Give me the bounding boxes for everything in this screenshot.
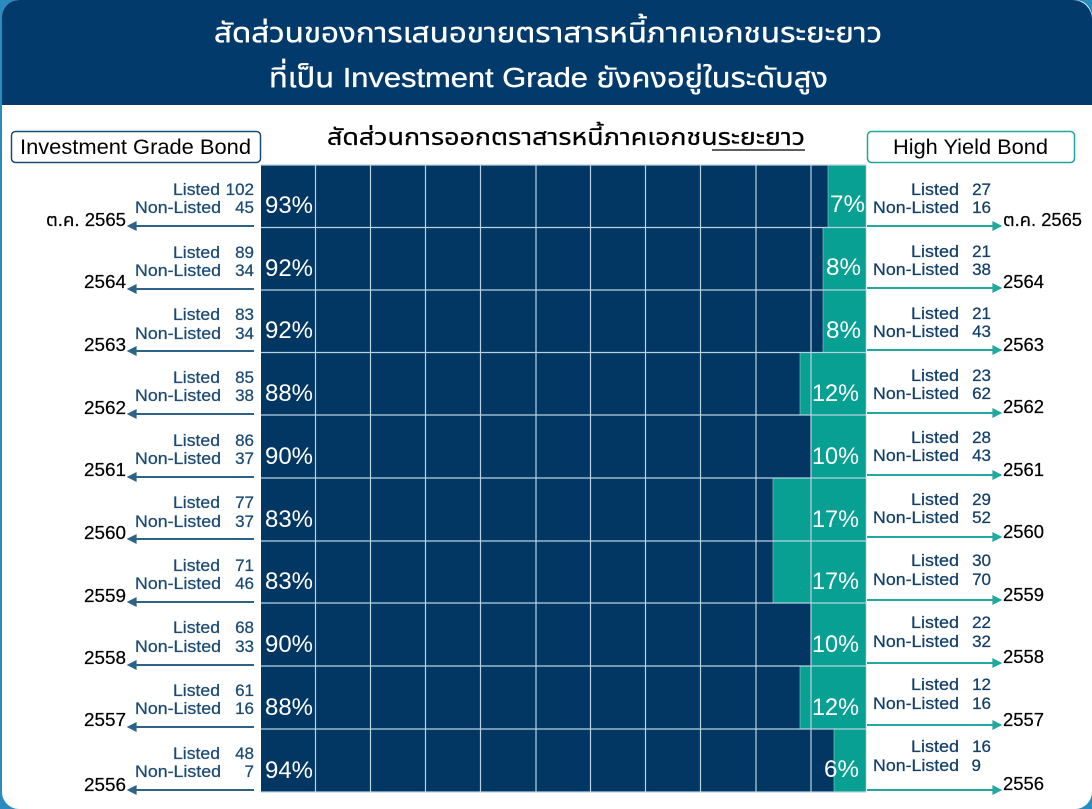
investment grade row: 2556: 48 xyxy=(235,744,254,763)
investment grade row: 2563: Listed xyxy=(173,305,220,324)
high yield row: 2562: 62 xyxy=(972,384,991,403)
investment grade row: 2556: 7 xyxy=(245,762,254,781)
legend: Investment Grade Bond: Investment Grade Bond xyxy=(20,136,251,159)
high yield row: 2564: Non-Listed xyxy=(873,260,959,279)
high yield percentages xyxy=(812,191,865,783)
high yield row: 2563: 21 xyxy=(972,304,991,323)
arrow xyxy=(128,222,254,230)
high yield row: 2558: 2558 xyxy=(1003,647,1044,667)
high yield row: 2564: Listed xyxy=(911,242,959,261)
investment grade row: 2559: 46 xyxy=(235,574,254,593)
arrow xyxy=(128,598,254,606)
investment grade row: 2559: 71 xyxy=(235,556,254,575)
investment grade row: 2561: Non-Listed xyxy=(135,449,221,468)
high yield row: 2557: 16 xyxy=(972,694,991,713)
high yield bars xyxy=(773,165,866,792)
investment grade percentages: 88% xyxy=(265,380,313,407)
high yield row: 2562 xyxy=(867,366,1044,417)
investment grade row: 2562: 38 xyxy=(235,386,254,405)
arrow xyxy=(867,409,1001,417)
investment grade row: 2559: Listed xyxy=(173,556,220,575)
high yield row: 2563: 2563 xyxy=(1003,335,1044,355)
high yield row: 2556: 9 xyxy=(972,756,981,775)
high yield percentages: 8% xyxy=(826,317,861,344)
arrow xyxy=(867,786,1001,794)
investment grade percentages: 83% xyxy=(265,506,313,533)
investment grade row: 2562 xyxy=(84,368,254,418)
investment grade row: 2563: 83 xyxy=(235,305,254,324)
investment grade percentages: 83% xyxy=(265,568,313,595)
high yield row: 2560 xyxy=(867,490,1044,542)
investment grade row: 2558: Non-Listed xyxy=(135,637,221,656)
high yield row: 2559: Non-Listed xyxy=(873,570,959,589)
investment grade row: ต.ค. 2565: ต.ค. 2565 xyxy=(46,210,126,230)
high yield percentages: 12% xyxy=(812,694,859,721)
high yield row: 2558: Listed xyxy=(911,613,959,632)
chart subtitle: สัดส่วนการออกตราสารหนี้ภาคเอกชนระยะยาว xyxy=(327,121,805,150)
investment grade row: 2562: Non-Listed xyxy=(135,386,221,405)
legend: High Yield Bond: High Yield Bond xyxy=(893,136,1048,159)
high yield row: 2563: Listed xyxy=(911,304,959,323)
investment grade row: 2563 xyxy=(84,305,254,355)
high yield percentages: 8% xyxy=(826,254,861,281)
investment grade row: 2558: 2558 xyxy=(84,648,126,668)
title banner xyxy=(2,0,1092,105)
investment grade row: 2557: 61 xyxy=(235,681,254,700)
arrow xyxy=(867,596,1001,604)
high yield row: 2559: 70 xyxy=(972,570,991,589)
arrow xyxy=(128,723,254,731)
investment grade row: 2556: Listed xyxy=(173,744,220,763)
investment grade row: 2559: 2559 xyxy=(84,586,126,606)
high yield row: 2556: Non-Listed xyxy=(873,756,959,775)
high yield row: 2556: 16 xyxy=(972,737,991,756)
arrow xyxy=(867,222,1001,230)
title line 1: สัดส่วนของการเสนอขายตราสารหนี้ภาคเอกชนระยะยาว xyxy=(214,13,882,48)
high yield row: 2557 xyxy=(867,675,1044,730)
high yield row: 2564: 2564 xyxy=(1003,272,1044,292)
investment grade row: 2556 xyxy=(84,744,254,795)
high yield row: 2556: 2556 xyxy=(1003,774,1044,794)
investment grade row: ต.ค. 2565: Listed xyxy=(173,180,220,199)
high yield row: 2560: Listed xyxy=(911,490,959,509)
high yield row: 2557: Non-Listed xyxy=(873,694,959,713)
investment grade row: ต.ค. 2565: 45 xyxy=(235,198,254,217)
investment grade row: 2558: 33 xyxy=(235,637,254,656)
high yield percentages: 10% xyxy=(812,443,859,470)
investment grade row: 2564: 34 xyxy=(235,261,254,280)
investment grade row: 2564: Non-Listed xyxy=(135,261,221,280)
high yield row: 2557: Listed xyxy=(911,675,959,694)
investment grade row: 2560: 77 xyxy=(235,493,254,512)
arrow xyxy=(867,471,1001,479)
investment grade percentages: 92% xyxy=(265,317,313,344)
arrow xyxy=(867,533,1001,541)
high yield row: 2559 xyxy=(867,551,1044,605)
arrow xyxy=(867,659,1001,667)
high yield row: 2561 xyxy=(867,428,1044,480)
high yield row: 2558: Non-Listed xyxy=(873,632,959,651)
investment grade row: 2561: 2561 xyxy=(84,460,126,480)
investment grade row: 2560: Listed xyxy=(173,493,220,512)
investment grade row: 2558: 68 xyxy=(235,618,254,637)
high yield row: 2559: 2559 xyxy=(1003,585,1044,605)
investment grade row: 2564 xyxy=(84,243,254,293)
high yield row: 2562: 2562 xyxy=(1003,397,1044,417)
arrow xyxy=(128,473,254,481)
high yield row: 2559: Listed xyxy=(911,551,959,570)
investment grade row: 2558 xyxy=(84,618,254,669)
investment grade row: 2564: Listed xyxy=(173,243,220,262)
high yield row: 2564 xyxy=(867,242,1044,292)
investment grade row: 2562: Listed xyxy=(173,368,220,387)
arrow xyxy=(128,661,254,669)
investment grade row: 2557: Non-Listed xyxy=(135,699,221,718)
high yield row: 2556: Listed xyxy=(911,737,959,756)
high yield row: 2561: Listed xyxy=(911,428,959,447)
high yield row: 2560: 2560 xyxy=(1003,522,1044,542)
high yield percentages: 7% xyxy=(830,191,865,218)
investment grade row: 2560: 37 xyxy=(235,512,254,531)
investment grade row: 2561: 37 xyxy=(235,449,254,468)
investment grade row: 2564: 89 xyxy=(235,243,254,262)
title line 2: ที่เป็น Investment Grade ยังคงอยู่ในระดับสูง xyxy=(269,58,828,95)
investment grade percentages: 92% xyxy=(265,255,313,282)
investment grade percentages xyxy=(265,192,313,784)
investment grade row: 2560 xyxy=(84,493,254,543)
investment grade percentages: 90% xyxy=(265,631,313,658)
high yield row: 2561: 28 xyxy=(972,428,991,447)
investment grade row: 2557 xyxy=(84,681,254,731)
investment grade row: ต.ค. 2565 xyxy=(46,180,254,230)
investment grade row: 2557: 2557 xyxy=(84,710,126,730)
arrow xyxy=(867,721,1001,729)
high yield row: 2556 xyxy=(867,737,1044,794)
high yield row: 2560: 29 xyxy=(972,490,991,509)
high yield percentages: 6% xyxy=(824,756,859,783)
arrow xyxy=(128,285,254,293)
high yield row: 2559: 30 xyxy=(972,551,991,570)
high yield row: 2561: 43 xyxy=(972,446,991,465)
arrow xyxy=(867,284,1001,292)
high yield row: 2562: Listed xyxy=(911,366,959,385)
high yield row: 2558 xyxy=(867,613,1044,667)
high yield row: 2562: Non-Listed xyxy=(873,384,959,403)
high yield row: 2563: Non-Listed xyxy=(873,322,959,341)
investment grade row: 2560: 2560 xyxy=(84,523,126,543)
investment grade percentages: 93% xyxy=(265,192,313,219)
high yield row: 2564: 21 xyxy=(972,242,991,261)
high yield row: 2561: 2561 xyxy=(1003,460,1044,480)
legend: Investment Grade Bond xyxy=(12,132,260,162)
investment grade row: 2561: Listed xyxy=(173,431,220,450)
high yield row: 2558: 22 xyxy=(972,613,991,632)
high yield row: ต.ค. 2565: Listed xyxy=(911,180,959,199)
investment grade row: ต.ค. 2565: 102 xyxy=(226,180,254,199)
high yield percentages: 17% xyxy=(812,506,859,533)
investment grade row: 2557: Listed xyxy=(173,681,220,700)
high yield row: 2561: Non-Listed xyxy=(873,446,959,465)
investment grade row: 2557: 16 xyxy=(235,699,254,718)
investment grade row: ต.ค. 2565: Non-Listed xyxy=(135,198,221,217)
arrow xyxy=(128,786,254,794)
high yield percentages: 12% xyxy=(812,380,859,407)
investment grade row: 2560: Non-Listed xyxy=(135,512,221,531)
high yield row: 2563 xyxy=(867,304,1044,355)
high yield row: 2557: 2557 xyxy=(1003,710,1044,730)
high yield row: ต.ค. 2565: 27 xyxy=(972,180,991,199)
high yield row: ต.ค. 2565: 16 xyxy=(972,198,991,217)
high yield row: ต.ค. 2565: ต.ค. 2565 xyxy=(1003,210,1082,230)
high yield row: ต.ค. 2565 xyxy=(867,180,1082,230)
high yield percentages: 10% xyxy=(812,631,859,658)
investment grade row: 2562: 2562 xyxy=(84,398,126,418)
investment grade row: 2563: 34 xyxy=(235,324,254,343)
high yield row: 2560: Non-Listed xyxy=(873,508,959,527)
investment grade row: 2559: Non-Listed xyxy=(135,574,221,593)
high yield row: 2558: 32 xyxy=(972,632,991,651)
investment grade percentages: 90% xyxy=(265,443,313,470)
high yield row: ต.ค. 2565: Non-Listed xyxy=(873,198,959,217)
investment grade row: 2556: Non-Listed xyxy=(135,762,221,781)
high yield row: 2563: 43 xyxy=(972,322,991,341)
investment grade percentages: 94% xyxy=(265,757,313,784)
arrow xyxy=(128,347,254,355)
arrow xyxy=(128,410,254,418)
stacked bar chart xyxy=(261,165,866,792)
arrow xyxy=(128,535,254,543)
investment grade row: 2563: Non-Listed xyxy=(135,324,221,343)
high yield row: 2564: 38 xyxy=(972,260,991,279)
high yield row: 2560: 52 xyxy=(972,508,991,527)
investment grade row: 2559 xyxy=(84,556,254,606)
investment grade row: 2556: 2556 xyxy=(84,775,126,795)
investment grade row: 2558: Listed xyxy=(173,618,220,637)
investment grade row: 2561: 86 xyxy=(235,431,254,450)
high yield percentages: 17% xyxy=(812,568,859,595)
investment grade percentages: 88% xyxy=(265,694,313,721)
legend: High Yield Bond xyxy=(868,132,1074,162)
investment grade row: 2564: 2564 xyxy=(84,272,126,292)
high yield row: 2557: 12 xyxy=(972,675,991,694)
investment grade row: 2563: 2563 xyxy=(84,335,126,355)
high yield row: 2562: 23 xyxy=(972,366,991,385)
investment grade row: 2562: 85 xyxy=(235,368,254,387)
arrow xyxy=(867,346,1001,354)
investment grade row: 2561 xyxy=(84,431,254,481)
